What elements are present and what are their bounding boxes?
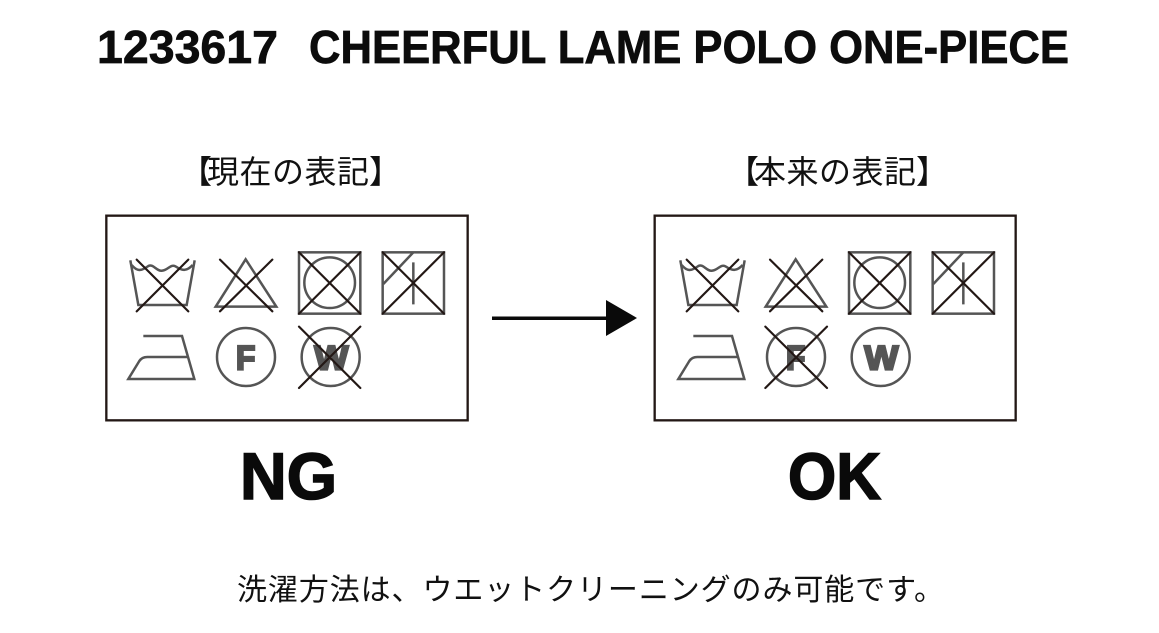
icon: no shade dry — [933, 252, 994, 314]
icon: iron — [128, 336, 194, 379]
icon: no bleach — [216, 259, 276, 311]
icon: iron — [678, 336, 744, 379]
icon: no tumble dry — [299, 252, 360, 314]
arrow — [492, 300, 637, 336]
title: 1233617 — [97, 21, 278, 73]
panel: current label (NG) — [106, 216, 468, 420]
panel: correct label (OK) — [655, 216, 1016, 420]
icon: no wash — [130, 260, 195, 311]
footer note: 洗濯方法は、ウエットクリーニングのみ可能です。 — [237, 574, 944, 607]
icon: wet clean W crossed out: W — [314, 340, 349, 378]
icon: dry clean F crossed out — [765, 327, 827, 388]
title: CHEERFUL LAME POLO ONE-PIECE — [309, 21, 1069, 73]
icon: wet clean W — [852, 328, 910, 386]
icon: no wash — [680, 260, 745, 311]
icon: dry clean F crossed out: F — [786, 340, 805, 378]
icon: no tumble dry — [849, 252, 910, 314]
icon: dry clean F: F — [236, 340, 255, 378]
icon: no shade dry — [383, 252, 444, 314]
icon: dry clean F — [217, 328, 275, 386]
icon: no bleach — [766, 259, 826, 311]
icon: wet clean W crossed out — [299, 327, 360, 388]
heading: correct label: 【本来の表記】 — [727, 154, 948, 190]
icon: wet clean W: W — [864, 340, 899, 378]
verdict: OK: OK — [788, 439, 881, 513]
heading: current label: 【現在の表記】 — [180, 154, 401, 190]
verdict: NG: NG — [240, 439, 337, 513]
